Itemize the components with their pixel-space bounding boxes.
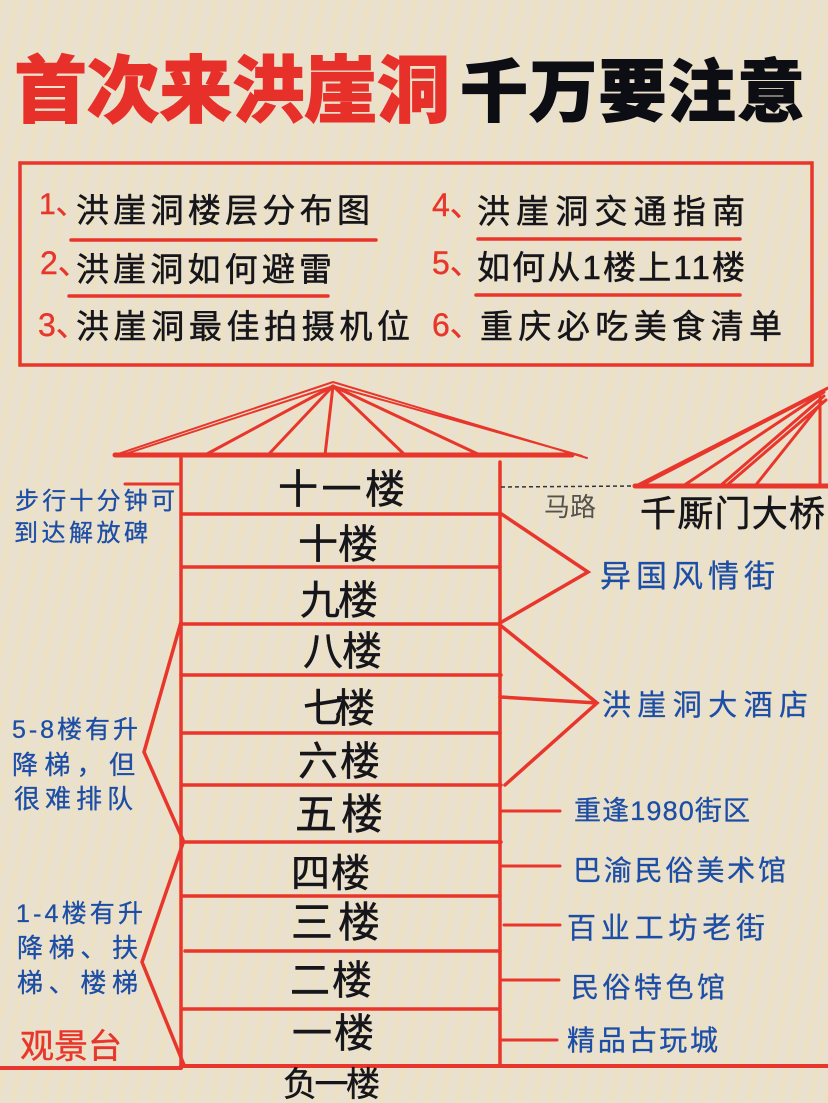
bridge — [635, 388, 828, 486]
item 4: 洪崖洞交通指南 — [477, 193, 745, 230]
floor labels: 四楼 — [291, 853, 370, 896]
item 4 — [432, 187, 745, 239]
right labels: 民俗特色馆 — [571, 972, 725, 1003]
right labels: 洪崖洞大酒店 — [602, 689, 808, 722]
floor labels: 七楼 — [303, 687, 375, 731]
item 6: 重庆必吃美食清单 — [480, 308, 782, 345]
floor labels: 八楼 — [303, 630, 382, 674]
road label: 马路 — [544, 492, 596, 522]
right labels: 百业工坊老街 — [567, 912, 765, 945]
left notes: 到达解放碑 — [14, 520, 148, 547]
right labels: 重逢1980街区 — [574, 796, 750, 826]
title: 首次来洪崖洞 — [14, 51, 450, 132]
item 2: 洪崖洞如何避雷 — [76, 251, 332, 288]
item 5 — [432, 245, 745, 295]
item 4: 4、 — [432, 187, 482, 223]
viewing deck label: 观景台 — [20, 1028, 122, 1066]
item 3: 洪崖洞最佳拍摄机位 — [76, 308, 410, 345]
floor labels: 负一楼 — [283, 1066, 380, 1103]
item 2: 2、 — [40, 245, 90, 281]
right labels — [567, 559, 808, 1056]
ground line — [0, 1066, 828, 1068]
brackets — [142, 513, 597, 1065]
walk stub line — [125, 482, 181, 486]
floor labels: 二楼 — [290, 959, 372, 1003]
floor labels: 九楼 — [300, 579, 378, 623]
left notes: 步行十分钟可 — [15, 488, 175, 515]
road dotted line — [501, 486, 635, 487]
left notes: 5-8楼有升 — [12, 716, 138, 744]
item 5: 5、 — [432, 245, 482, 281]
item 1: 洪崖洞楼层分布图 — [76, 192, 370, 229]
leader lines — [500, 811, 560, 1040]
bridge label: 千厮门大桥 — [640, 493, 825, 534]
right labels: 异国风情街 — [600, 559, 775, 594]
item 1: 1、 — [39, 188, 86, 221]
floor labels: 五楼 — [295, 791, 383, 838]
left notes — [12, 488, 175, 998]
right labels: 精品古玩城 — [567, 1025, 718, 1056]
title — [14, 51, 805, 132]
building walls and floors — [181, 457, 501, 1066]
title: 千万要注意 — [460, 55, 805, 131]
roof — [115, 382, 587, 458]
right labels: 巴渝民俗美术馆 — [573, 855, 786, 886]
floor labels — [278, 468, 405, 1103]
left notes: 降梯、扶 — [17, 933, 138, 963]
item 5: 如何从1楼上11楼 — [477, 249, 745, 286]
item 3: 3、 — [38, 307, 88, 343]
item 1 — [39, 188, 376, 240]
left notes: 1-4楼有升 — [16, 900, 143, 928]
floor labels: 三楼 — [291, 899, 380, 946]
item 6: 6、 — [432, 307, 482, 343]
panel: table of contents — [20, 163, 812, 365]
floor labels: 十楼 — [298, 523, 378, 567]
item 2 — [40, 245, 332, 296]
left notes: 很难排队 — [14, 784, 133, 814]
floor labels: 十一楼 — [278, 468, 405, 512]
floor labels: 一楼 — [292, 1012, 374, 1056]
left notes: 梯、楼梯 — [17, 968, 138, 998]
left notes: 降梯，但 — [12, 750, 135, 780]
floor labels: 六楼 — [298, 740, 380, 784]
